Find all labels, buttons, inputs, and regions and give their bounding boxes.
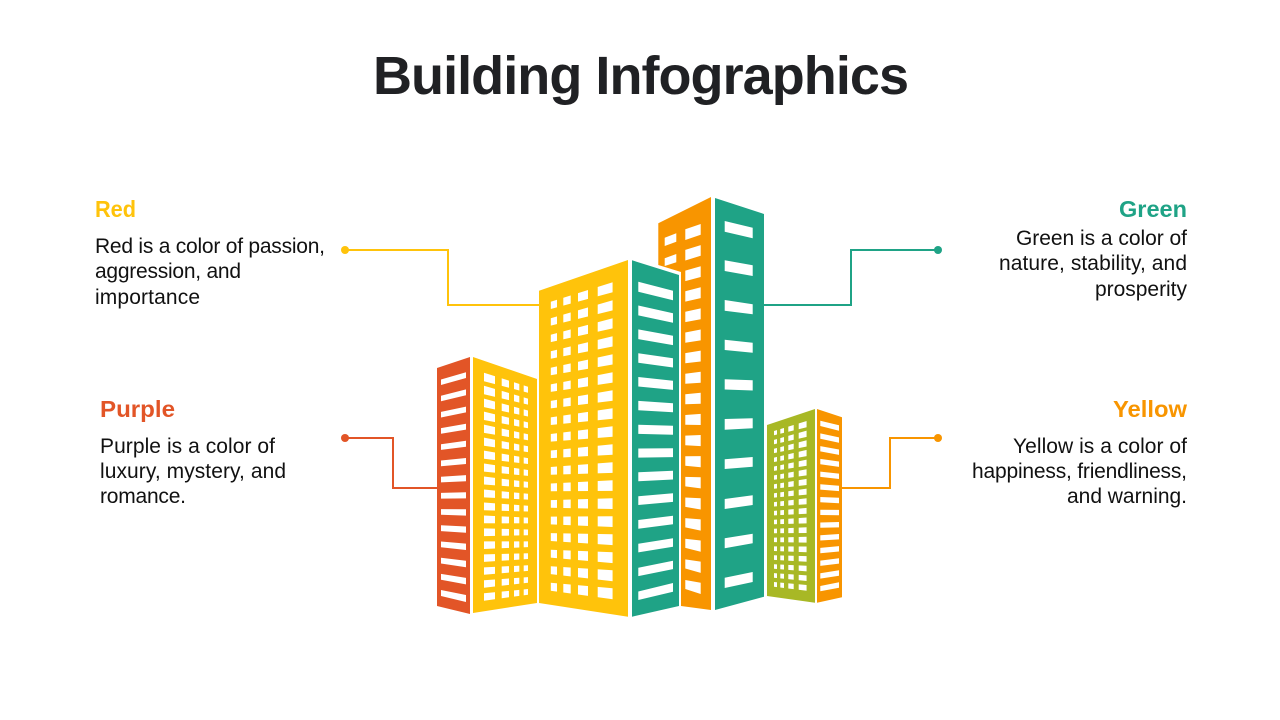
building: centre, yellow front [539,260,628,617]
connector: yellow [842,434,942,488]
connector: red [341,246,539,305]
text block: yellow description: happiness, friendliness, [972,460,1187,483]
building: tall back, green side [715,198,764,610]
text block: red description: importance [95,286,200,309]
text block: red description: aggression, and [95,260,241,283]
text block: red description [95,235,325,309]
text block: purple description: Purple is a color of [100,435,275,458]
panel: red text [95,196,325,309]
building: centre, green side [632,260,679,617]
panel: purple text [100,396,286,508]
text block: yellow description [972,435,1187,508]
building: right small, olive front [767,409,815,603]
heading: yellow: Yellow [1113,396,1187,422]
building: tall back, orange front [658,197,711,610]
text block: purple description: luxury, mystery, and [100,460,286,483]
heading: red: Red [95,196,136,222]
connector: purple [341,434,437,488]
title: Building Infographics [373,46,909,106]
building: left small, yellow front [473,357,537,613]
building illustration [437,197,842,617]
heading: purple: Purple [100,396,175,422]
building: left small, red-orange side [437,357,470,614]
text block: green description: nature, stability, and [999,252,1187,275]
building: right small, orange side [817,409,842,603]
text block: red description: Red is a color of passion, [95,235,325,258]
panel: green text [999,196,1188,301]
panel: yellow text [972,396,1187,508]
text block: purple description [100,435,286,508]
text block: green description: prosperity [1095,278,1188,301]
text block: yellow description: and warning. [1067,485,1187,508]
text block: green description [999,227,1188,301]
connector: green [764,246,942,305]
text block: purple description: romance. [100,485,186,508]
text block: green description: Green is a color of [1016,227,1187,250]
heading: green: Green [1119,196,1187,222]
text block: yellow description: Yellow is a color of [1013,435,1187,458]
